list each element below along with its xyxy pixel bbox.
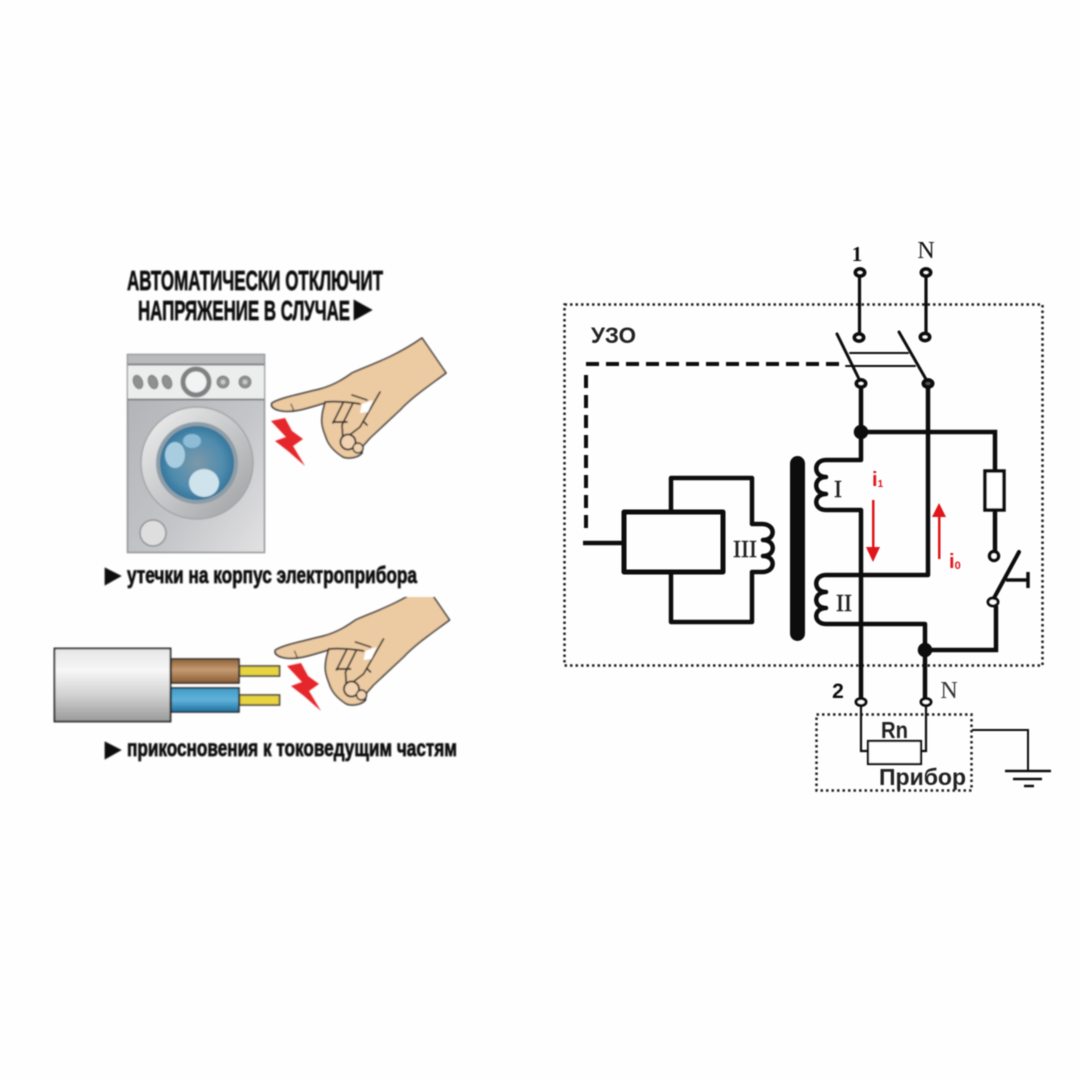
current arrows and labels [866,469,961,573]
heading: НАПРЯЖЕНИЕ В СЛУЧАЕ [138,295,350,326]
current arrows and labels: 1 [878,479,884,490]
icon: two-core cable [54,648,280,722]
heading [127,265,383,326]
terminal labels: N [940,678,958,704]
dashed trip linkage [586,364,846,530]
caption: appliance leakage: утечки на корпус электроприбора [127,562,417,588]
heading: АВТОМАТИЧЕСКИ ОТКЛЮЧИТ [127,265,383,296]
icon: electric spark at wire [287,663,321,711]
load device dotted box [816,714,972,790]
ground symbol [972,730,1051,786]
icon: washing machine [128,354,264,552]
icon: pointing hand touching live wire [275,585,450,705]
panel: RCD circuit diagram [564,238,1051,790]
winding labels: III [733,537,757,563]
terminal labels: 1 [852,242,862,266]
terminal labels [852,238,958,704]
label: Rn: Rn [881,717,908,743]
icon: electric spark at appliance [271,418,305,466]
terminal labels: N [917,238,935,264]
input terminals and switch [837,269,932,387]
winding II and neutral conductor [816,388,928,701]
relay and winding III [583,478,773,622]
current arrows and labels: i [949,551,955,573]
label: УЗО: УЗО [591,323,636,348]
icon: pointing hand touching appliance [272,338,446,458]
caption: touching live parts: прикосновения к токоведущим частям [127,735,457,761]
label: terminal 2: 2 [832,680,844,703]
winding I and phase conductor [816,388,861,701]
current arrows and labels: 0 [955,560,961,572]
panel: RCD protection illustrations [54,265,457,761]
winding labels: I [834,477,842,503]
RCD dotted enclosure [564,304,1042,666]
winding labels [733,477,852,617]
label: Прибор: Прибор [879,764,966,790]
load resistor and output terminals [856,698,931,764]
current arrows and labels: i [872,469,878,491]
test circuit with resistor and button [856,427,1028,655]
transformer core [790,456,805,641]
winding labels: II [836,591,852,617]
